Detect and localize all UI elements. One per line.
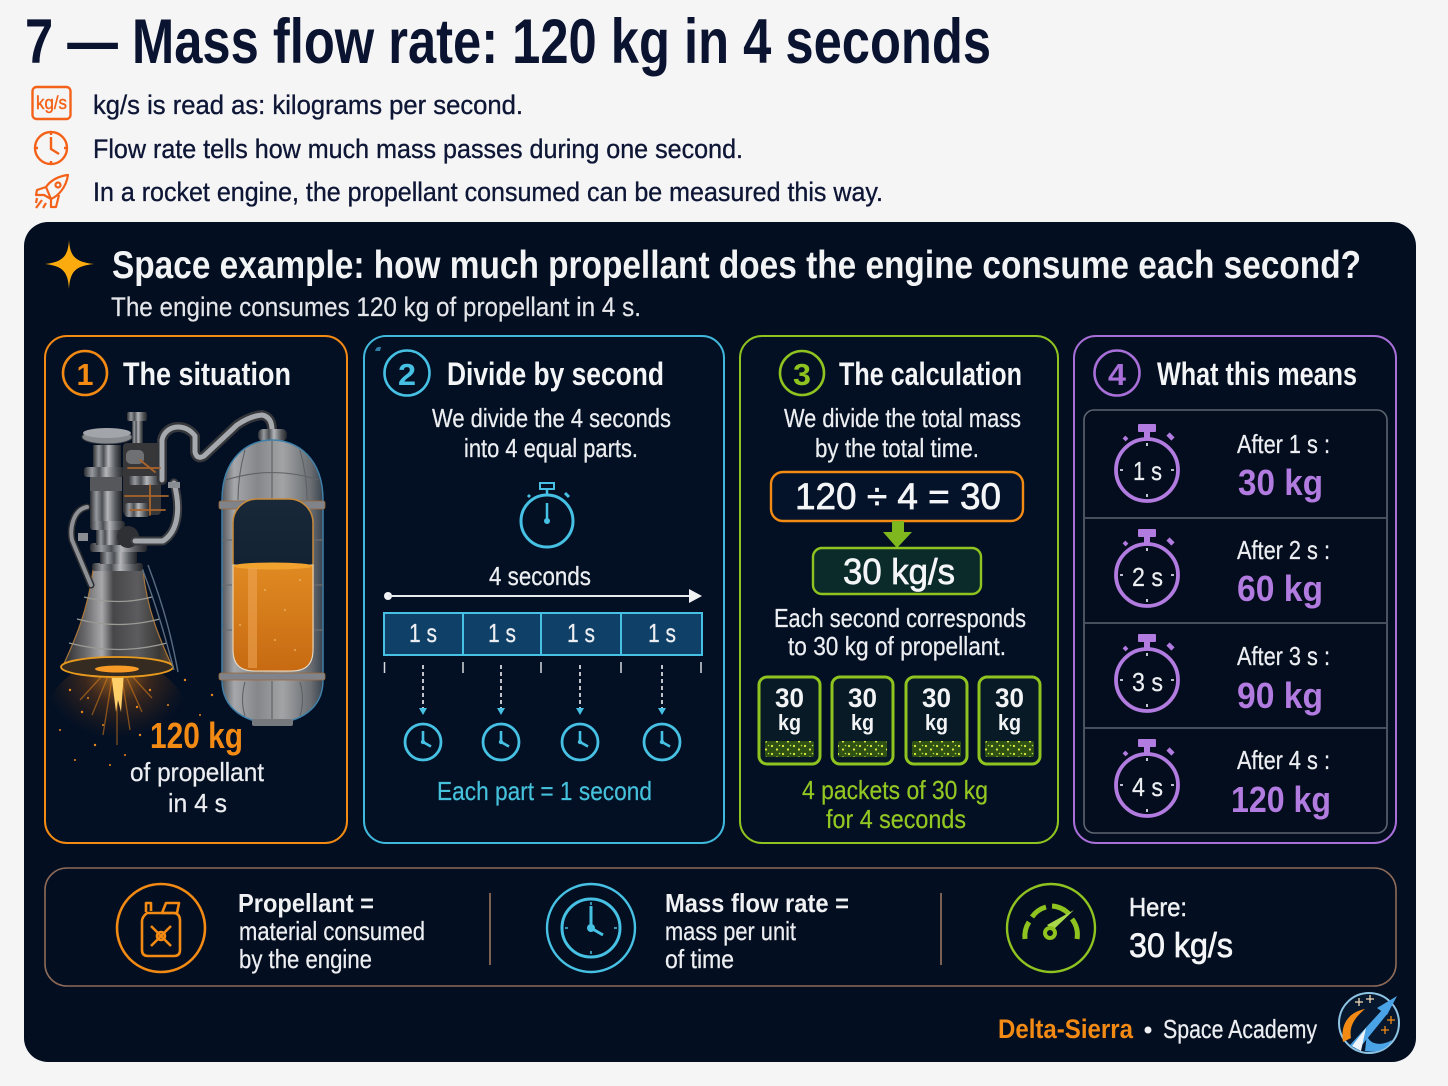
icon: propellant can — [117, 884, 205, 972]
packet 1 — [759, 677, 820, 764]
row: after 4 s: 120 kg — [1231, 779, 1331, 820]
icon: stopwatch — [521, 483, 573, 547]
heading: divide by second: Divide by second — [447, 356, 664, 392]
packet 2 — [832, 677, 893, 764]
panel 2: divide by second — [364, 336, 724, 843]
segmented bar: 4 × 1 s: 1 s — [409, 618, 437, 648]
arrow: green down — [883, 521, 912, 548]
result box — [813, 548, 981, 594]
icon: rocket — [36, 175, 68, 208]
term: here 30 kg/s: Here: — [1129, 892, 1187, 922]
heading: what this means: What this means — [1157, 356, 1357, 392]
badge 3: 3 — [793, 357, 811, 392]
badge 2: 2 — [398, 357, 416, 392]
term: propellant — [238, 888, 425, 974]
row: after 3 s: 90 kg — [1237, 675, 1323, 716]
footer brand: Delta-Sierra — [998, 1014, 1134, 1044]
segmented bar: 4 × 1 s: 1 s — [648, 618, 676, 648]
logo — [1339, 993, 1399, 1053]
text: to 30 kg of propellant: to 30 kg of propellant. — [788, 631, 1006, 661]
text: kg/s definition: kg/s is read as: kilograms per second. — [93, 90, 523, 120]
packet 2: 30 — [848, 683, 877, 713]
text: each second corresponds: Each second corresponds — [774, 603, 1026, 633]
term: here 30 kg/s — [1129, 892, 1233, 965]
term: propellant: Propellant = — [238, 888, 374, 918]
arrow: 4 second timeline — [384, 589, 702, 603]
packet 4: 30 — [995, 683, 1024, 713]
icon: clock ring — [547, 884, 635, 972]
formula box: 120 ÷ 4 = 30 — [795, 476, 1001, 517]
row: after 4 s: After 4 s : — [1237, 745, 1330, 775]
term: propellant: by the engine — [239, 944, 372, 974]
text: we divide the total mass: We divide the total mass — [784, 403, 1021, 433]
row: after 2 s: 60 kg — [1237, 568, 1323, 609]
term: propellant: material consumed — [239, 916, 425, 946]
row: after 2 s: After 2 s : — [1237, 535, 1330, 565]
panel 3: the calculation — [740, 336, 1058, 843]
row: after 3 s — [1116, 634, 1330, 716]
row: after 3 s: 3 s — [1132, 667, 1163, 697]
icon: gold star — [45, 240, 94, 289]
packet 2: kg — [851, 710, 874, 735]
footer brand — [998, 1014, 1317, 1044]
caption: for 4 seconds: for 4 seconds — [826, 804, 966, 834]
icon: gauge — [1007, 884, 1095, 972]
heading: the situation: The situation — [123, 356, 291, 392]
row: after 1 s: 30 kg — [1238, 462, 1323, 503]
row: after 4 s — [1116, 739, 1331, 820]
dark main panel — [24, 222, 1416, 1062]
text: flow rate definition: Flow rate tells how much mass passes during one second. — [93, 134, 743, 164]
result box: 30 kg/s — [843, 551, 955, 592]
term: mass flow rate: mass per unit — [665, 916, 797, 946]
row: after 4 s: 4 s — [1132, 772, 1163, 802]
packet 3 — [906, 677, 967, 764]
badge 4 — [1094, 350, 1140, 396]
badge 4: 4 — [1108, 357, 1127, 392]
label: each part = 1 second: Each part = 1 second — [437, 776, 652, 806]
illustration: propellant tank — [219, 429, 325, 726]
text: by the total time: by the total time. — [815, 433, 979, 463]
value: 120 kg: 120 kg — [150, 715, 243, 756]
row: after 1 s — [1116, 424, 1330, 503]
segmented bar: 4 × 1 s — [384, 613, 702, 655]
icon: kg/s badge: kg/s — [36, 93, 67, 113]
section subtitle: The engine consumes 120 kg of propellant in 4 s. — [111, 292, 641, 322]
panel 4: what this means — [1074, 336, 1396, 843]
packet 1: kg — [778, 710, 801, 735]
label: of propellant: of propellant — [130, 757, 265, 787]
illustration: rocket engine — [45, 412, 272, 784]
packet 3: kg — [925, 710, 948, 735]
label: in 4 s: in 4 s — [168, 788, 227, 818]
badge 2 — [384, 350, 430, 396]
text: into 4 equal parts: into 4 equal parts. — [464, 433, 638, 463]
label: 4 seconds: 4 seconds — [489, 561, 591, 591]
intro list — [32, 87, 883, 208]
row: after 2 s — [1116, 529, 1330, 609]
badge 3 — [780, 351, 824, 395]
packet 1: 30 — [775, 683, 804, 713]
term: here 30 kg/s: 30 kg/s — [1129, 927, 1233, 965]
badge 1 — [63, 351, 107, 395]
icon: clock — [35, 132, 67, 164]
icon: kg/s badge — [32, 87, 70, 119]
row: after 1 s: 1 s — [1133, 456, 1162, 486]
title: 7 — Mass flow rate: 120 kg in 4 seconds — [25, 7, 991, 77]
glossary strip — [45, 868, 1396, 986]
icons: four clocks — [405, 724, 680, 760]
row: after 1 s: After 1 s : — [1237, 429, 1330, 459]
caption: 4 packets of 30 kg: 4 packets of 30 kg — [802, 775, 988, 805]
packet 4: kg — [998, 710, 1021, 735]
heading: the calculation: The calculation — [839, 356, 1022, 392]
footer brand: Space Academy — [1163, 1014, 1317, 1044]
term: mass flow rate: Mass flow rate = — [665, 888, 849, 918]
segmented bar: 4 × 1 s: 1 s — [488, 618, 516, 648]
row: after 2 s: 2 s — [1132, 562, 1163, 592]
text: we divide the 4 seconds: We divide the 4 seconds — [432, 403, 671, 433]
term: mass flow rate: of time — [665, 944, 734, 974]
packet 4 — [979, 677, 1040, 764]
panel 1: the situation — [45, 336, 347, 843]
dashed arrows to clocks — [419, 665, 666, 715]
segmented bar: 4 × 1 s: 1 s — [567, 618, 595, 648]
row: after 3 s: After 3 s : — [1237, 641, 1330, 671]
table frame — [1084, 410, 1387, 833]
formula box — [771, 472, 1023, 521]
text: rocket engine note: In a rocket engine, the propellant consumed can be measured this way. — [93, 177, 883, 207]
term: mass flow rate — [665, 888, 849, 974]
packet 3: 30 — [922, 683, 951, 713]
badge 1: 1 — [76, 357, 94, 392]
